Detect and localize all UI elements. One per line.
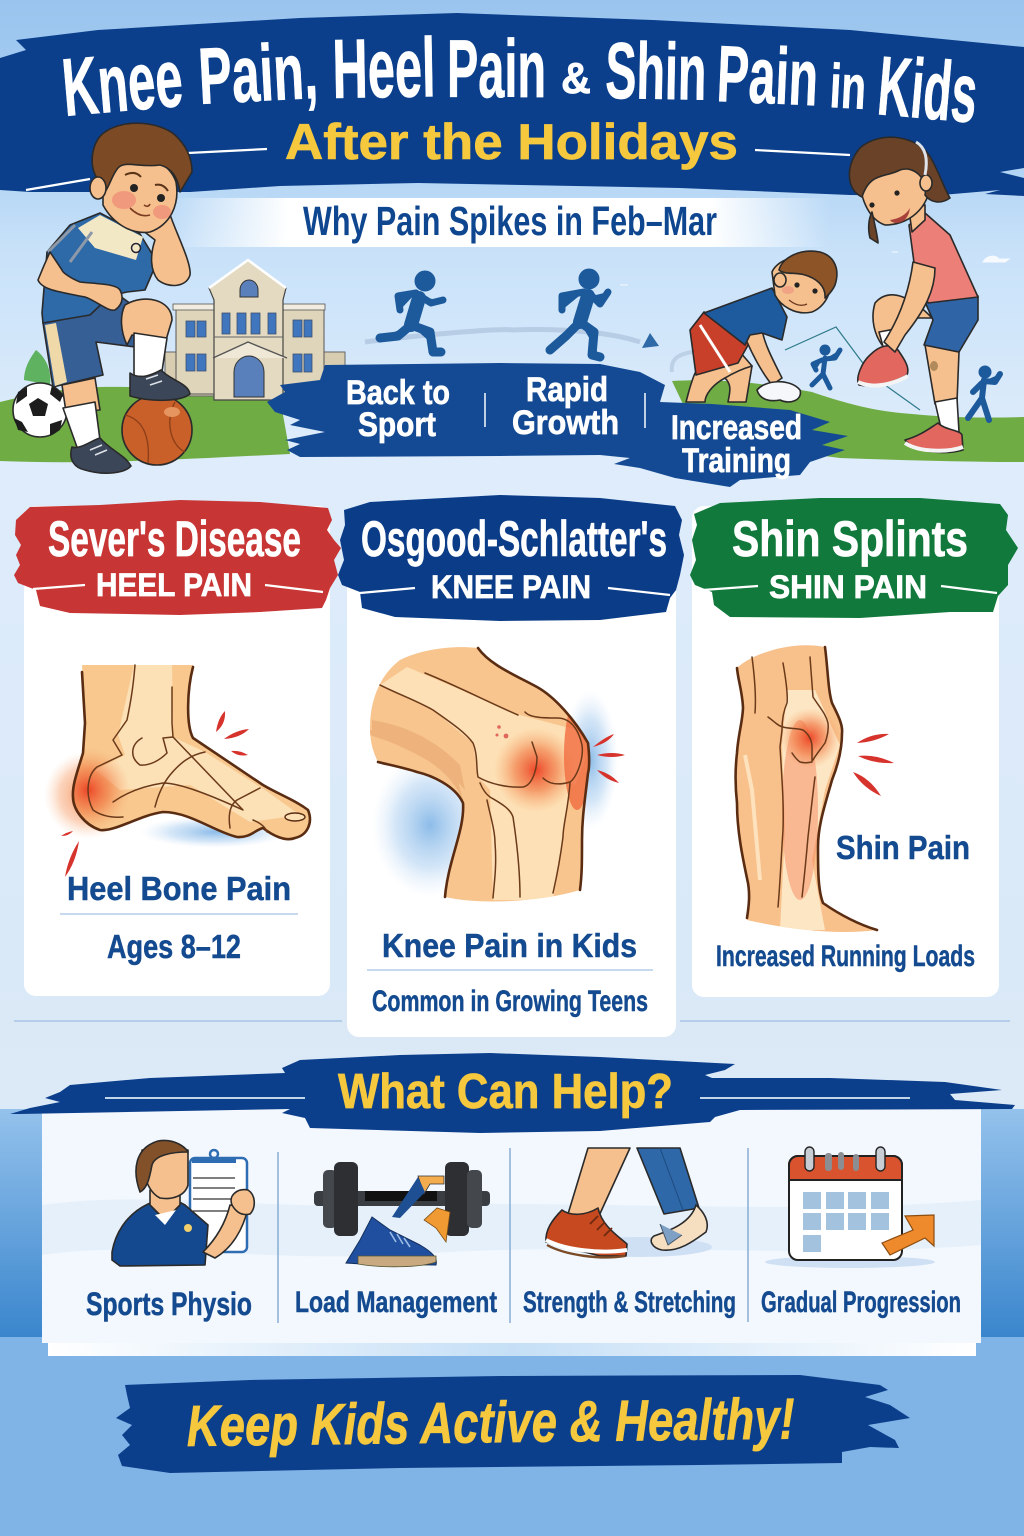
cause: increased training: Increased xyxy=(671,409,802,447)
background xyxy=(0,0,1024,1110)
bush xyxy=(24,350,50,385)
card: shin xyxy=(692,506,999,997)
cause: back to sport: Back to xyxy=(346,374,450,412)
icon: walking feet xyxy=(546,1148,712,1257)
arm to cheek xyxy=(142,208,190,285)
subtitle: after the holidays: After the Holidays xyxy=(285,114,738,170)
head xyxy=(103,155,177,232)
bottom banner: Keep Kids Active & Healthy! xyxy=(186,1387,795,1459)
title words: Pain xyxy=(715,29,820,122)
card: knee xyxy=(347,587,676,1037)
title words: & xyxy=(561,54,591,103)
boy with sore knee xyxy=(38,123,192,473)
label: Strength & Stretching xyxy=(523,1286,736,1319)
shorts xyxy=(43,296,143,387)
runner silhouette 2 xyxy=(550,269,659,357)
cause: back to sport: Sport xyxy=(358,406,436,444)
label: Load Management xyxy=(295,1286,497,1319)
basketball xyxy=(122,395,192,465)
shin illustration xyxy=(736,645,894,932)
cause: increased training: Training xyxy=(682,442,791,480)
item: load management xyxy=(295,1162,497,1319)
knee illustration xyxy=(370,647,625,901)
icon: dumbbell and shoe xyxy=(314,1162,490,1267)
title words: Pain xyxy=(447,24,546,115)
cone course line and far kids xyxy=(620,252,1009,420)
hair xyxy=(92,123,192,192)
heading banner: What Can Help? xyxy=(338,1065,673,1119)
heel age: Ages 8–12 xyxy=(107,928,241,965)
panel: what can help xyxy=(10,1053,1015,1356)
title words: Pain, xyxy=(196,26,320,121)
header: sever's disease xyxy=(14,500,341,615)
cause: rapid growth xyxy=(512,371,619,442)
runner silhouette 1 xyxy=(365,271,640,352)
icon: calendar with arrow xyxy=(765,1147,935,1268)
cause: rapid growth: Growth xyxy=(512,404,619,442)
raised knee xyxy=(121,299,172,345)
cause: back to sport xyxy=(346,374,450,444)
header: sever's disease: HEEL PAIN xyxy=(96,567,252,603)
knee age: Common in Growing Teens xyxy=(372,985,648,1018)
cause: rapid growth: Rapid xyxy=(526,371,608,409)
knee card text: Knee Pain in Kids xyxy=(382,927,637,964)
title words: Shin xyxy=(605,26,707,117)
dividers xyxy=(278,1148,748,1323)
school building xyxy=(165,260,345,400)
soccer ball xyxy=(13,383,67,437)
header: sever's disease: Sever's Disease xyxy=(48,511,301,567)
item: strength and stretching xyxy=(523,1148,736,1319)
title words xyxy=(59,20,981,141)
header: shin splints: SHIN PAIN xyxy=(769,569,927,605)
green hill: left xyxy=(0,387,290,462)
item: sports physio xyxy=(86,1140,254,1322)
heading banner xyxy=(10,1053,1015,1133)
title words: Heel xyxy=(332,20,436,116)
title banner xyxy=(0,13,1024,196)
girl tying shoe xyxy=(849,137,978,453)
boy tying shoe xyxy=(672,251,837,402)
item: gradual progression xyxy=(761,1147,961,1319)
header: osgood-schlatter's: KNEE PAIN xyxy=(431,569,591,605)
card: heel xyxy=(24,506,330,996)
header: shin splints xyxy=(690,498,1018,618)
header: shin splints: Shin Splints xyxy=(732,511,968,567)
bottom banner xyxy=(116,1375,910,1473)
foot illustration xyxy=(44,660,310,877)
heading strip: why pain spikes: Why Pain Spikes in Feb–Mar xyxy=(303,198,717,244)
title words: Knee xyxy=(59,33,186,134)
shin card text: Shin Pain xyxy=(836,829,970,866)
jersey xyxy=(42,213,157,323)
label: Sports Physio xyxy=(86,1286,252,1322)
standing leg xyxy=(62,378,100,412)
cause: increased training xyxy=(671,409,802,480)
header: osgood-schlatter's xyxy=(338,495,684,621)
blue banner: causes xyxy=(267,363,848,487)
title words: in xyxy=(828,52,868,123)
green hill: right xyxy=(672,380,1024,462)
arm on knee xyxy=(38,252,122,310)
header: osgood-schlatter's: Osgood-Schlatter's xyxy=(361,511,667,567)
subtitle: after the holidays xyxy=(26,114,850,190)
icon: physio with clipboard xyxy=(112,1140,254,1266)
heel card text: Heel Bone Pain xyxy=(67,870,291,907)
